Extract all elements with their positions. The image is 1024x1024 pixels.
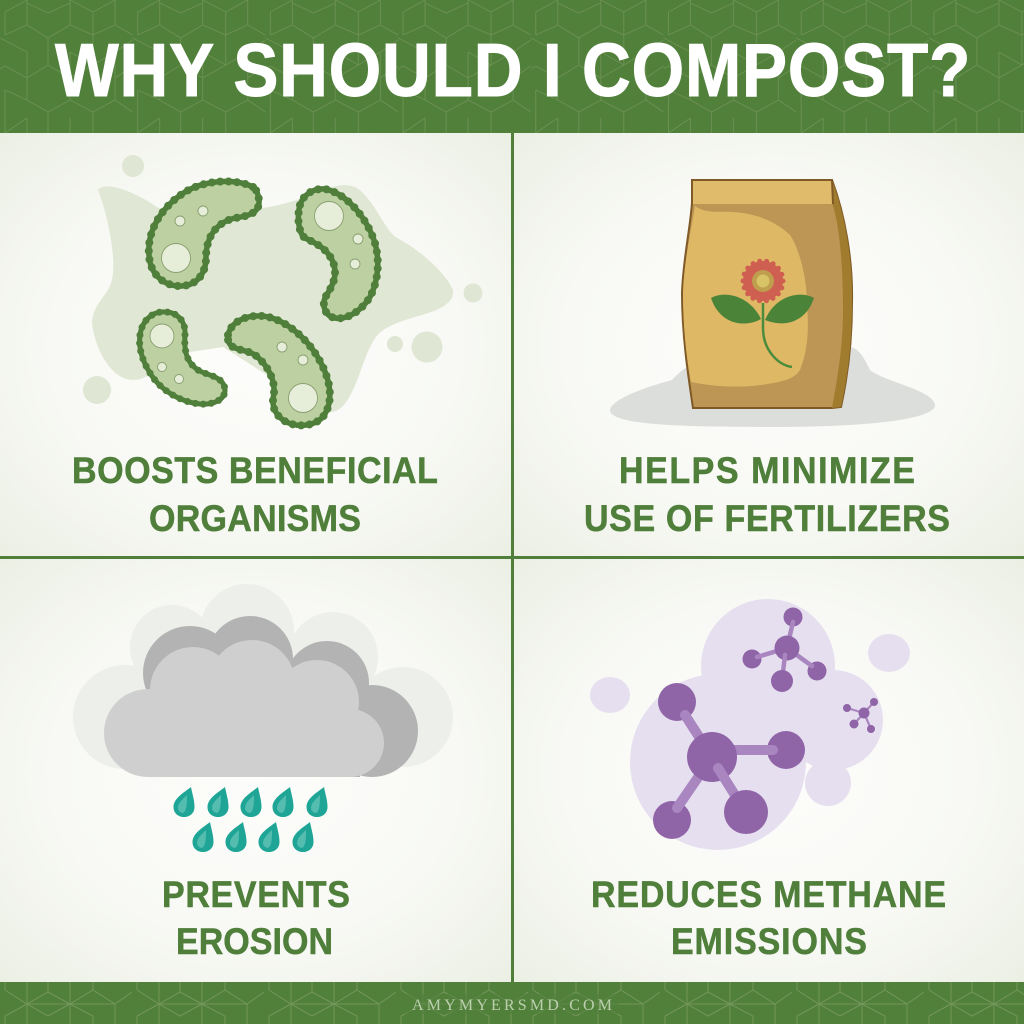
background blob xyxy=(92,185,453,412)
large methane molecule xyxy=(653,683,805,839)
cloud back xyxy=(143,616,418,777)
label: boosts beneficial organisms: BOOSTS BENEFICIAL xyxy=(72,450,438,491)
flower stem xyxy=(763,303,792,367)
organism top left xyxy=(149,181,259,286)
label: helps minimize use of fertilizers xyxy=(584,450,950,539)
organism bottom left xyxy=(140,312,225,404)
rain cloud xyxy=(104,616,418,777)
title: WHY SHOULD I COMPOST? xyxy=(55,29,970,113)
label: helps minimize use of fertilizers: USE OF FERTILIZERS xyxy=(584,498,950,539)
bag outline and body xyxy=(682,180,852,408)
bag side strip xyxy=(832,180,852,408)
bag shadow xyxy=(610,347,935,427)
medium methane molecule xyxy=(742,608,826,692)
small methane molecule xyxy=(843,698,878,733)
panel: prevents erosion xyxy=(0,559,511,982)
label: boosts beneficial organisms xyxy=(72,450,438,539)
label: reduces methane emissions: REDUCES METHANE xyxy=(591,874,946,915)
label: prevents erosion: EROSION xyxy=(176,921,333,962)
panel: boosts beneficial organisms xyxy=(0,133,511,557)
footer url backing xyxy=(405,994,619,1014)
label: prevents erosion: PREVENTS xyxy=(162,874,350,915)
footer banner xyxy=(0,982,1024,1024)
label: prevents erosion xyxy=(162,874,350,962)
flower head xyxy=(743,261,783,301)
organism bottom middle xyxy=(228,316,330,425)
decorative dots xyxy=(83,155,482,404)
rain drops xyxy=(174,787,328,852)
fertilizer bag xyxy=(682,180,852,408)
label: reduces methane emissions: EMISSIONS xyxy=(671,921,867,962)
footer url: AMYMYERSMD.COM xyxy=(412,997,612,1014)
header banner xyxy=(0,0,1024,133)
methane cloud background xyxy=(590,599,910,850)
bag light front xyxy=(683,206,808,387)
bag top flap xyxy=(692,180,832,204)
label: helps minimize use of fertilizers: HELPS MINIMIZE xyxy=(619,450,915,491)
flower leaves xyxy=(711,295,814,324)
label: reduces methane emissions xyxy=(591,874,946,962)
panel: helps minimize fertilizers xyxy=(513,133,1024,557)
cloud front xyxy=(104,640,384,777)
organism top right xyxy=(298,189,378,318)
label: boosts beneficial organisms: ORGANISMS xyxy=(149,498,361,539)
panel: reduces methane emissions xyxy=(513,559,1024,982)
cloud halo xyxy=(73,584,453,769)
